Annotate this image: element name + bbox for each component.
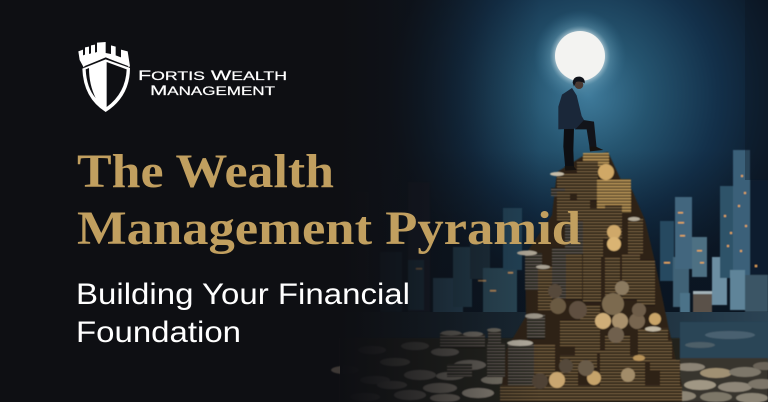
window lights — [416, 175, 757, 292]
moon — [534, 10, 626, 102]
subtitle: Foundation — [76, 316, 241, 349]
lower sky shade — [340, 150, 768, 320]
right coins — [630, 362, 768, 402]
subtitle: Building Your Financial — [76, 278, 410, 311]
city skyline — [351, 150, 768, 322]
logo — [78, 42, 287, 112]
night sky glow — [340, 0, 768, 330]
title — [77, 145, 581, 255]
logo shield — [78, 42, 130, 112]
logo wordmark: M ANAGEMENT — [150, 82, 275, 98]
logo wordmark: F ORTIS W EALTH — [138, 67, 287, 83]
jacket — [558, 88, 584, 129]
man standing on the coins — [558, 77, 603, 171]
raised leg — [575, 120, 597, 150]
ground coins — [331, 322, 768, 402]
subtitle — [76, 278, 410, 349]
shoes — [565, 166, 577, 171]
title: The Wealth — [77, 145, 334, 198]
edge vignette — [745, 0, 768, 180]
logo wordmark — [138, 67, 287, 98]
back leg — [563, 129, 574, 169]
stack tops — [441, 172, 661, 346]
title: Management Pyramid — [77, 202, 581, 255]
face — [575, 80, 583, 89]
coin faces — [532, 164, 661, 389]
water reflection — [340, 312, 768, 362]
left coins — [331, 342, 509, 402]
left fade — [340, 0, 540, 402]
coin pyramid — [440, 152, 682, 402]
coin stacks — [440, 153, 682, 402]
foreground stacks — [440, 333, 462, 348]
hair — [573, 77, 585, 87]
